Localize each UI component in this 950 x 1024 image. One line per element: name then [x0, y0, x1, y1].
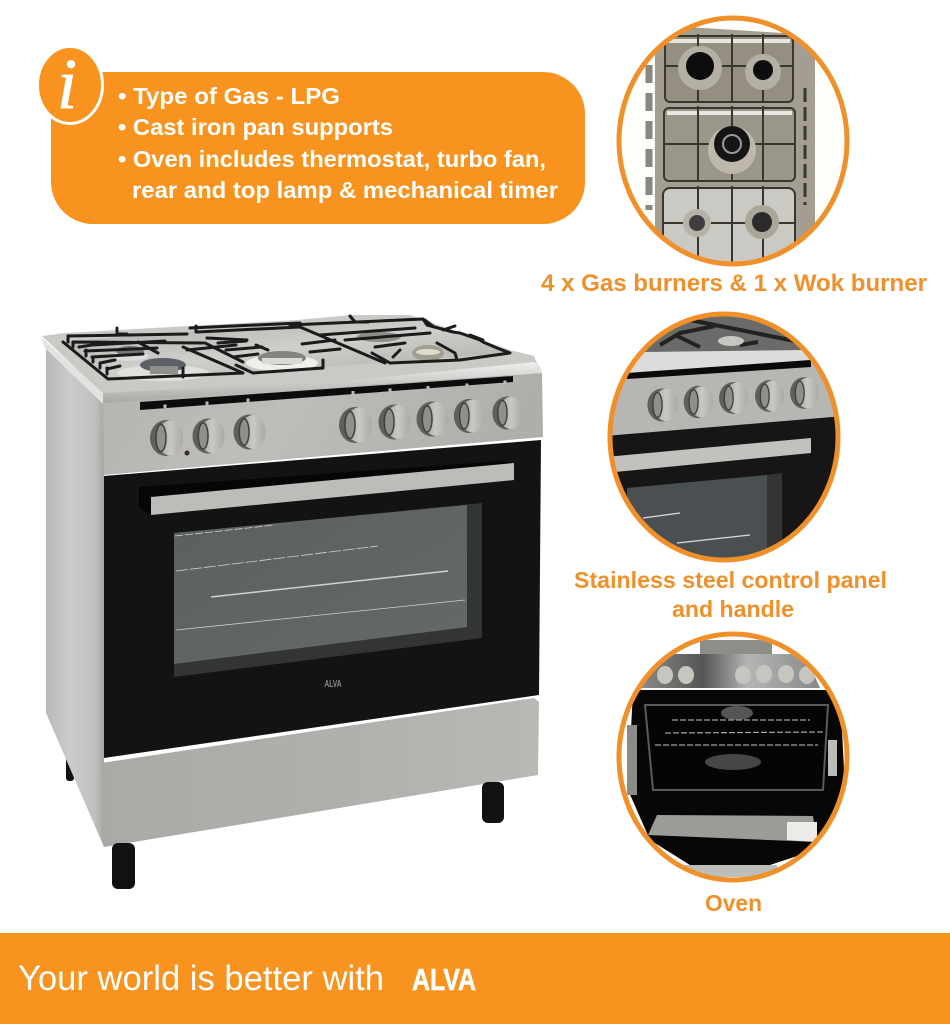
control panel photo	[612, 316, 836, 558]
feature list: • Oven includes thermostat, turbo fan,	[118, 146, 546, 172]
kick panel	[101, 698, 539, 847]
back foot	[66, 755, 74, 781]
caption: Stainless steel control panel	[574, 567, 887, 593]
door handle	[139, 461, 514, 515]
side panel	[46, 345, 104, 847]
feature list	[118, 83, 558, 203]
pan supports	[63, 316, 510, 379]
ring	[610, 314, 838, 560]
oven door	[104, 440, 541, 758]
icon: info badge: i	[57, 44, 77, 124]
oven window	[174, 503, 482, 677]
cooktop left lip	[41, 337, 103, 404]
cooktop surface	[42, 315, 539, 394]
feature list: rear and top lamp & mechanical timer	[132, 177, 558, 203]
tagline: Your world is better with	[18, 959, 384, 998]
label strip	[140, 376, 513, 410]
panel background	[51, 72, 585, 224]
callout: oven	[615, 630, 855, 916]
back right leg	[482, 782, 504, 823]
brand logo: ALVA	[412, 962, 476, 997]
control panel	[103, 373, 543, 475]
front lip	[103, 362, 542, 404]
ring	[619, 634, 847, 880]
info panel	[38, 44, 585, 224]
feature list: • Cast iron pan supports	[118, 114, 393, 140]
control knobs	[150, 396, 523, 456]
stove	[41, 315, 543, 889]
callout: burners	[541, 15, 927, 297]
feature list: • Type of Gas - LPG	[118, 83, 340, 109]
callout: control panel: and handle	[672, 596, 794, 622]
ring	[619, 18, 847, 264]
burners	[112, 332, 444, 381]
footer band	[0, 933, 950, 1024]
brand on door: ALVA	[324, 679, 342, 690]
footer background	[0, 933, 950, 1024]
caption: 4 x Gas burners & 1 x Wok burner	[541, 270, 927, 297]
icon: info badge	[38, 44, 102, 124]
caption: Oven	[705, 890, 762, 916]
burner plate	[63, 318, 510, 379]
burners photo	[646, 28, 815, 262]
oven photo	[627, 640, 844, 877]
callout: control panel	[574, 310, 887, 622]
indicator light	[184, 450, 190, 456]
front left leg	[112, 843, 135, 889]
